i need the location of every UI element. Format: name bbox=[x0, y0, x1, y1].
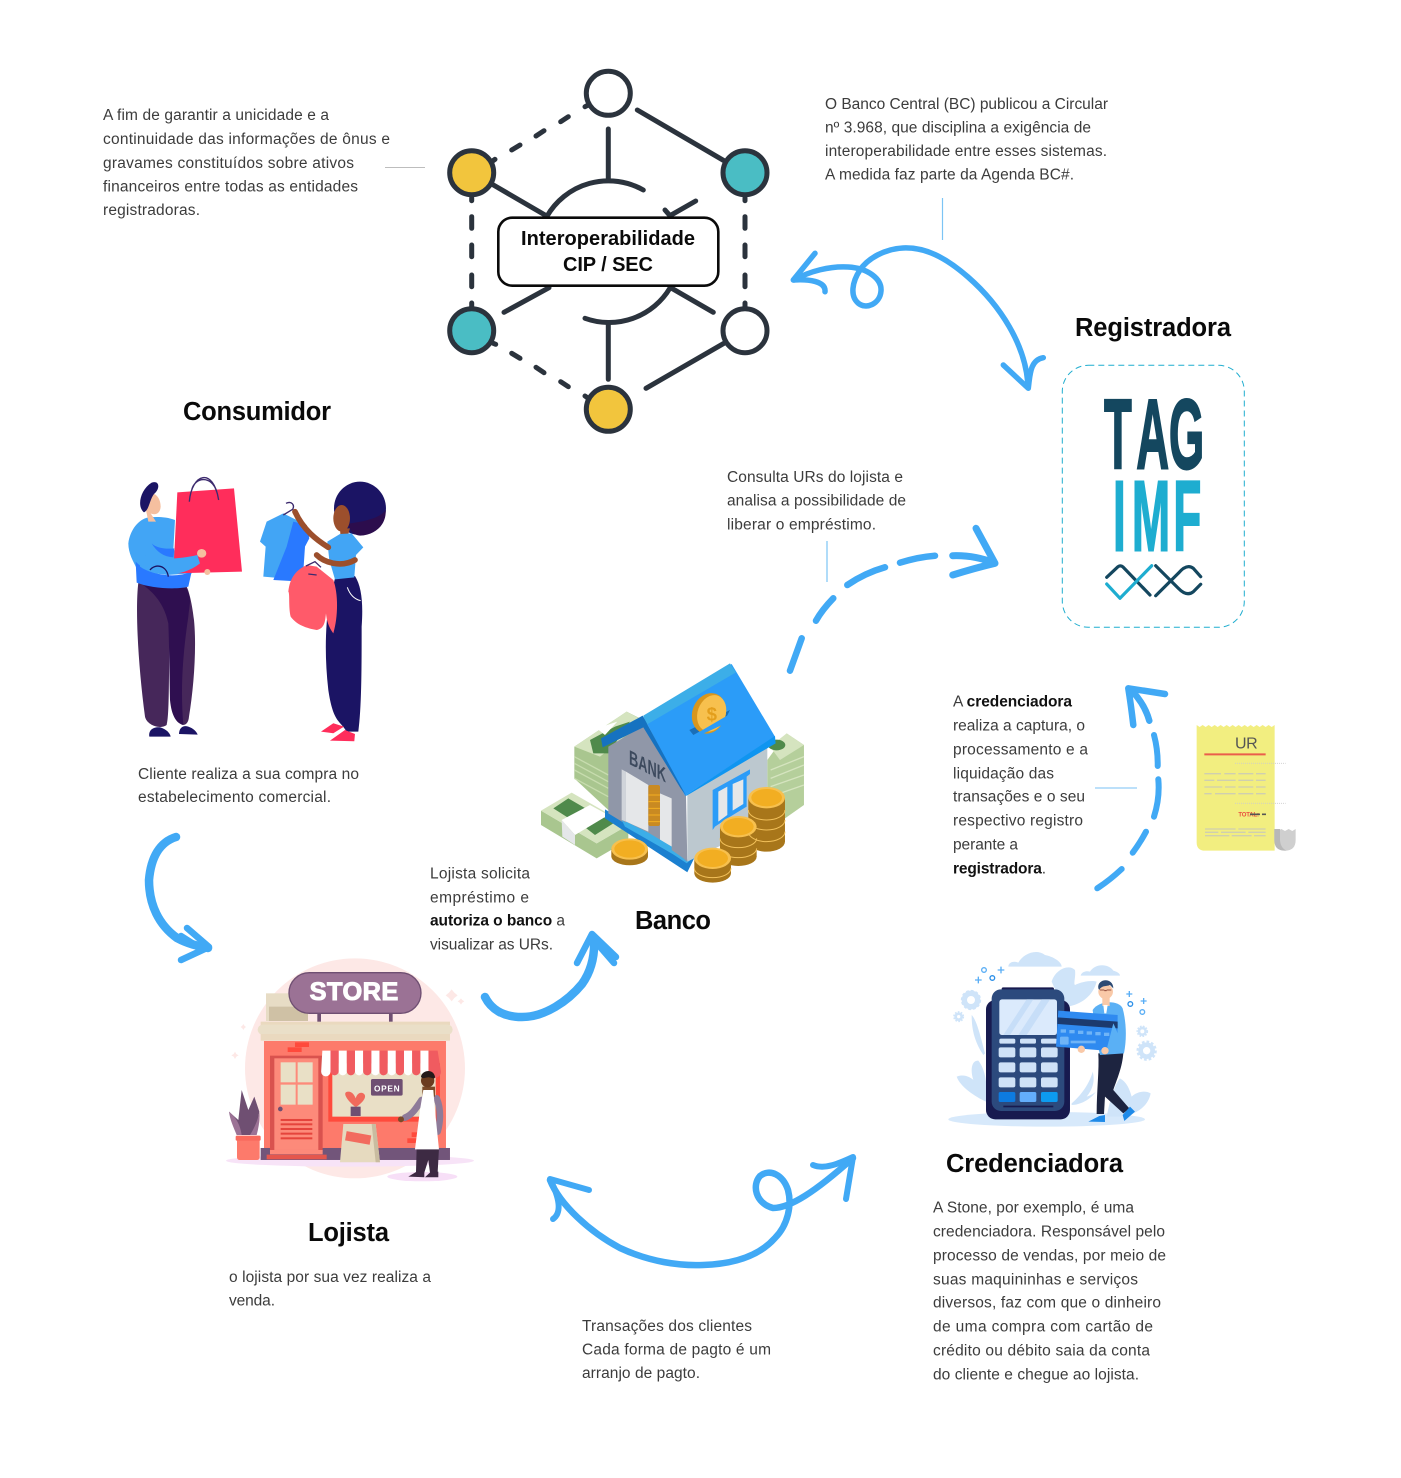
text block: Stone: diversos, faz com que o dinheiro bbox=[933, 1294, 1161, 1312]
text block: lojista solicita: visualizar as URs. bbox=[430, 936, 553, 954]
text block: lojista bbox=[229, 1269, 431, 1310]
text block: consulta URs bbox=[727, 469, 906, 534]
text block: lojista solicita bbox=[430, 866, 565, 954]
text block: Banco Central: O Banco Central (BC) publicou a Circular bbox=[825, 96, 1108, 113]
text block: Stone: suas maquininhas e serviços bbox=[933, 1272, 1138, 1288]
illustration: banco: BANK bbox=[629, 745, 666, 787]
illustration: consumidores bbox=[128, 478, 386, 741]
logo: TAG IMF bbox=[1062, 365, 1244, 627]
text block: Stone bbox=[933, 1200, 1166, 1384]
text block: consumidor: Cliente realiza a sua compra no bbox=[138, 766, 359, 783]
text block: credenciadora captura: registradora. bbox=[953, 860, 1046, 878]
text block: unicidade das informações bbox=[103, 107, 390, 219]
text block: Stone: credenciadora. Responsável pelo bbox=[933, 1224, 1165, 1240]
text block: transações: Cada forma de pagto é um bbox=[582, 1342, 771, 1358]
arrow: credenciadora to registradora bbox=[1097, 688, 1165, 888]
text block: credenciadora captura: respectivo registro bbox=[953, 812, 1083, 830]
text block: unicidade das informações: continuidade das informações de ônus e bbox=[103, 131, 390, 148]
text block: Stone: processo de vendas, por meio de bbox=[933, 1248, 1166, 1264]
illustration: loja: STORE bbox=[310, 978, 398, 1006]
text block: Banco Central bbox=[825, 96, 1108, 184]
illustration: loja: OPEN bbox=[374, 1083, 400, 1093]
text block: unicidade das informações: gravames constituídos sobre ativos bbox=[103, 155, 354, 172]
network diagram: interoperabilidade: CIP / SEC bbox=[563, 254, 653, 276]
illustration: recibo UR bbox=[1197, 725, 1296, 851]
logo: TAG IMF: IMF bbox=[1113, 462, 1201, 573]
text block: transações: Transações dos clientes bbox=[582, 1318, 752, 1335]
network diagram: interoperabilidade bbox=[450, 71, 767, 431]
text block: Stone: crédito ou débito saia da conta bbox=[933, 1342, 1150, 1360]
text block: credenciadora captura bbox=[953, 694, 1088, 878]
illustration: banco bbox=[541, 663, 804, 883]
text block: consulta URs: analisa a possibilidade de bbox=[727, 492, 906, 510]
text block: transações bbox=[582, 1318, 771, 1382]
text block: lojista solicita: autoriza o banco a bbox=[430, 912, 565, 930]
arrow: lojista to banco bbox=[485, 934, 616, 1017]
text block: transações: arranjo de pagto. bbox=[582, 1365, 700, 1382]
text block: lojista: venda. bbox=[229, 1292, 275, 1310]
arrow: consumidor to lojista bbox=[149, 837, 209, 960]
text block: consulta URs: Consulta URs do lojista e bbox=[727, 469, 903, 486]
text block: credenciadora captura: realiza a captura, o bbox=[953, 718, 1085, 734]
illustration: credenciadora bbox=[948, 952, 1156, 1127]
text block: credenciadora captura: processamento e a bbox=[953, 742, 1088, 758]
heading: Lojista: Lojista bbox=[308, 1219, 390, 1247]
text block: lojista solicita: empréstimo e bbox=[430, 890, 529, 906]
heading: Registradora: Registradora bbox=[1075, 314, 1232, 342]
illustration: recibo UR: TOTAL: bbox=[1238, 813, 1259, 819]
text block: Banco Central: A medida faz parte da Agenda BC#. bbox=[825, 166, 1074, 184]
illustration: banco: $ bbox=[707, 704, 718, 725]
text block: lojista solicita: Lojista solicita bbox=[430, 866, 530, 882]
network diagram: interoperabilidade: Interoperabilidade bbox=[521, 228, 695, 250]
text block: credenciadora captura: perante a bbox=[953, 836, 1018, 854]
heading: Credenciadora: Credenciadora bbox=[946, 1150, 1124, 1178]
text block: Stone: A Stone, por exemplo, é uma bbox=[933, 1200, 1134, 1216]
text block: Banco Central: nº 3.968, que disciplina a exigência de bbox=[825, 120, 1091, 136]
text block: unicidade das informações: A fim de garantir a unicidade e a bbox=[103, 107, 329, 124]
logo: TAG IMF: TAG bbox=[1104, 380, 1204, 490]
text block: lojista: o lojista por sua vez realiza a bbox=[229, 1269, 431, 1286]
text block: Stone: de uma compra com cartão de bbox=[933, 1318, 1153, 1336]
text block: credenciadora captura: transações e o seu bbox=[953, 788, 1085, 806]
text block: credenciadora captura: liquidação das bbox=[953, 766, 1054, 782]
arrow: banco to registradora bbox=[790, 528, 995, 671]
text block: consumidor: estabelecimento comercial. bbox=[138, 789, 331, 806]
arrow: interoperabilidade to registradora bbox=[793, 248, 1043, 388]
text block: unicidade das informações: financeiros entre todas as entidades bbox=[103, 178, 358, 196]
text block: unicidade das informações: registradoras. bbox=[103, 202, 200, 219]
illustration: recibo UR: UR bbox=[1235, 735, 1258, 752]
text block: Banco Central: interoperabilidade entre esses sistemas. bbox=[825, 143, 1107, 160]
heading: Banco: Banco bbox=[635, 907, 711, 935]
text block: Stone: do cliente e chegue ao lojista. bbox=[933, 1366, 1139, 1384]
text block: consumidor bbox=[138, 766, 359, 806]
text block: consulta URs: liberar o empréstimo. bbox=[727, 516, 876, 534]
text block: credenciadora captura: A credenciadora bbox=[953, 694, 1072, 710]
arrow: lojista and credenciadora bbox=[550, 1157, 853, 1265]
illustration: loja bbox=[226, 958, 474, 1181]
heading: Consumidor: Consumidor bbox=[183, 398, 331, 426]
